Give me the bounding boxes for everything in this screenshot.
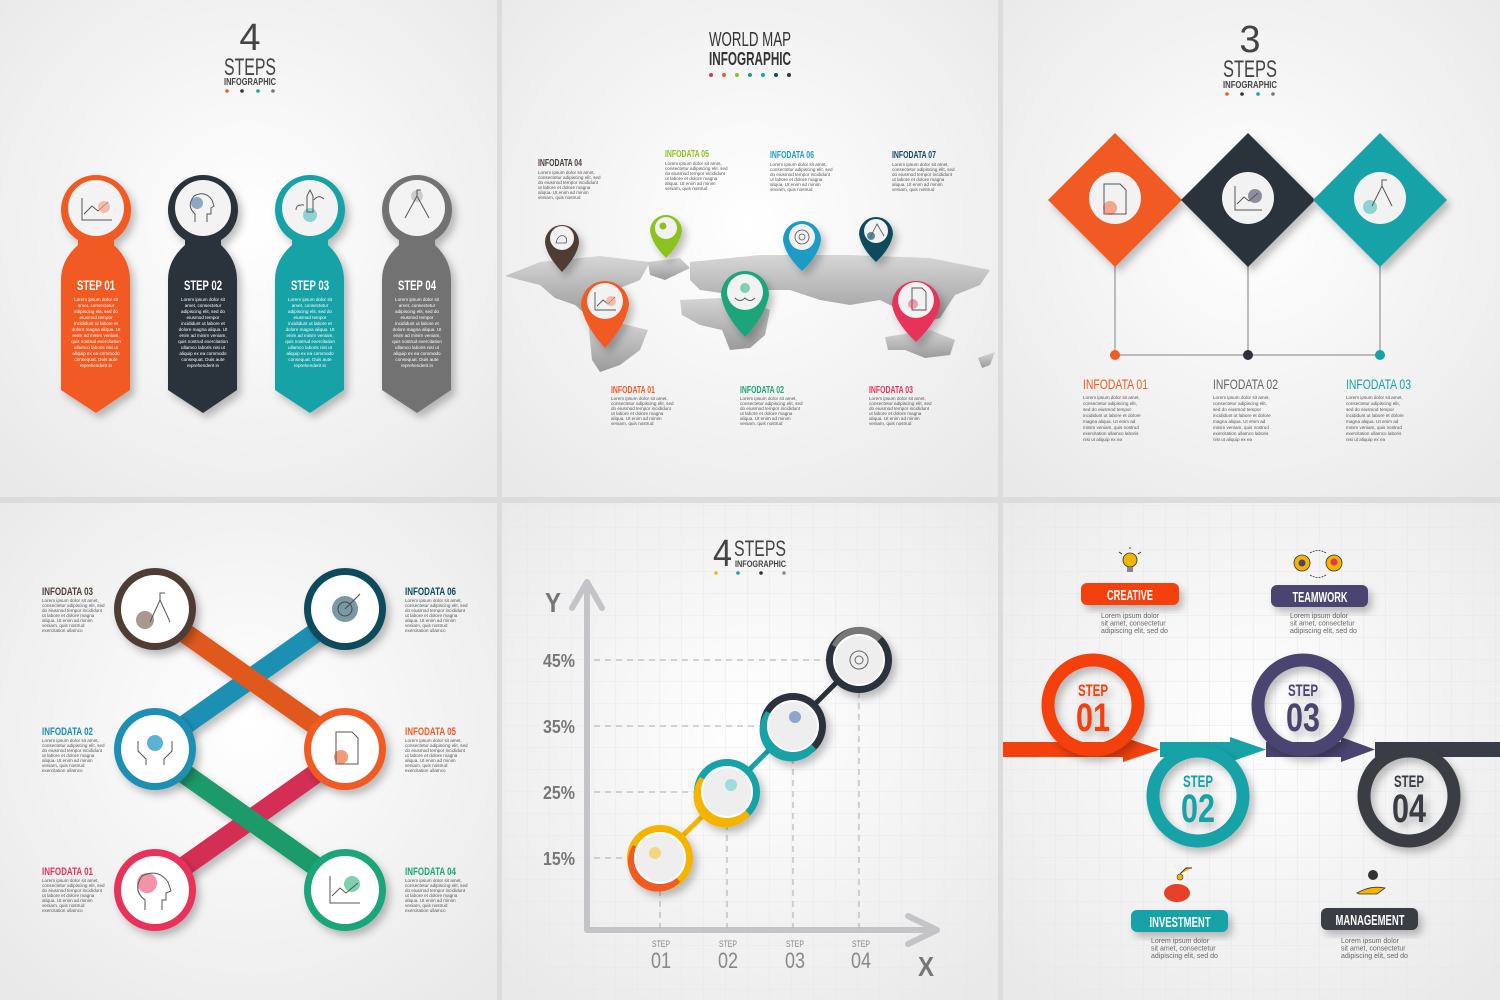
panel: X cross: exercitation ullamco <box>42 768 83 773</box>
pillar texts: ullamco laboris nisi ut <box>395 345 440 350</box>
labels: infodata X: INFODATA 03 <box>42 586 93 598</box>
lorem blocks: map: do eiusmod tempor incididunt <box>538 180 599 185</box>
lorem blocks: map: Lorem ipsum dolor sit amet, <box>892 162 949 167</box>
pillar texts: consequat. Duis aute <box>181 357 225 362</box>
node: step 02 <box>694 759 760 827</box>
lorem blocks: map: do eiusmod tempor incididunt <box>770 172 831 177</box>
pillar texts: incididunt ut labore et <box>288 321 333 326</box>
title: 4 steps chart: INFOGRAPHIC <box>735 559 786 569</box>
lorem texts <box>1101 613 1408 960</box>
pillar texts: aliquip ex ea commodo <box>179 351 227 356</box>
bands <box>165 619 335 880</box>
pillar texts: amet, consectetur <box>78 303 115 308</box>
labels: infodata X: INFODATA 06 <box>405 586 456 598</box>
lorem blocks: map: consectetur adipiscing elit, sed <box>770 167 833 172</box>
pillar texts: quis nostrud exercitation <box>178 339 228 344</box>
button: teamwork: TEAMWORK <box>1292 589 1348 606</box>
lorem texts: adipiscing elit, sed do <box>1101 628 1168 635</box>
pillar texts: amet, consectetur <box>292 303 329 308</box>
lorem blocks: map: Lorem ipsum dolor sit amet, <box>611 396 668 401</box>
labels: infodata: INFODATA 02 <box>740 385 784 396</box>
panel: X cross: ut labore et dolore magna <box>42 893 95 898</box>
pillar texts: incididunt ut labore et <box>181 321 226 326</box>
lorem blocks: map: do eiusmod tempor incididunt <box>892 172 953 177</box>
panel: growth chart <box>543 533 937 982</box>
diamond: step 2 <box>1181 133 1315 267</box>
panel: X cross: do eiusmod tempor incididunt <box>405 608 466 613</box>
pillar texts: quis nostrud exercitation <box>285 339 335 344</box>
panel: X cross: Lorem ipsum dolor sit amet, <box>405 738 462 743</box>
lorem blocks: map: veniam, quis nostrud <box>611 421 654 426</box>
panel: X cross: consectetur adipiscing elit, sed <box>42 883 105 888</box>
axis labels: 25% <box>543 783 575 803</box>
diamond: step 1 <box>1048 133 1182 267</box>
labels: infodata X: INFODATA 05 <box>405 726 456 738</box>
lorem blocks: map: aliqua. Ut enim ad minim <box>770 182 821 187</box>
button: management <box>1321 908 1418 930</box>
node: step 03 <box>760 693 826 761</box>
lorem blocks: map: Lorem ipsum dolor sit amet, <box>740 396 797 401</box>
pillar texts: consequat. Duis aute <box>395 357 439 362</box>
lorem blocks: map: Lorem ipsum dolor sit amet, <box>770 162 827 167</box>
labels: infodata: INFODATA 07 <box>892 150 936 161</box>
panel: X cross: ut labore et dolore magna <box>405 893 458 898</box>
button: teamwork <box>1271 585 1368 607</box>
lorem texts: Lorem ipsum dolor <box>1341 938 1400 945</box>
connectors <box>660 660 859 858</box>
panel: X cross: ut labore et dolore magna <box>405 613 458 618</box>
panel: X cross: veniam, quis nostrud <box>405 623 448 628</box>
lorem blocks: map: consectetur adipiscing elit, sed <box>665 166 728 171</box>
pillar texts: ullamco laboris nisi ut <box>74 345 119 350</box>
button: creative: CREATIVE <box>1107 587 1153 604</box>
ring: step 02: 02 <box>1181 787 1215 831</box>
step labels: STEP <box>786 939 804 949</box>
panel: X cross: aliqua. Ut enim ad minim <box>42 758 93 763</box>
pillar texts: eiusmod tempor <box>401 315 434 320</box>
lorem blocks: map: ut labore et dolore magna <box>770 177 823 182</box>
pillar texts: aliquip ex ea commodo <box>393 351 441 356</box>
panel: X cross: exercitation ullamco <box>405 908 446 913</box>
pillar texts <box>71 297 442 368</box>
panel: X cross: ut labore et dolore magna <box>42 753 95 758</box>
title: 4 steps: STEPS <box>224 54 276 81</box>
pillar texts: aliquip ex ea commodo <box>72 351 120 356</box>
node: step 01 <box>627 825 693 892</box>
lorem blocks: map: do eiusmod tempor incididunt <box>611 406 672 411</box>
axis labels: 45% <box>543 651 575 671</box>
title: 3 steps <box>1223 19 1277 96</box>
step labels: 04 <box>851 948 871 973</box>
pillar: step 03 <box>275 175 345 413</box>
pillar texts: consequat. Duis aute <box>288 357 332 362</box>
pillar texts: aliquip ex ea commodo <box>286 351 334 356</box>
panel: X cross: Lorem ipsum dolor sit amet, <box>405 598 462 603</box>
pillar texts: Lorem ipsum dolor sit <box>181 297 226 302</box>
lorem blocks: map: veniam, quis nostrud <box>869 421 912 426</box>
panel: X cross: Lorem ipsum dolor sit amet, <box>42 738 99 743</box>
labels: infodata: INFODATA 06 <box>770 150 814 161</box>
panel: 4 steps pillars <box>61 17 452 413</box>
step labels: STEP <box>652 939 670 949</box>
panel: 3 steps diamonds: consectetur adipiscing elit, <box>1083 401 1137 406</box>
panel: X cross: veniam, quis nostrud <box>42 763 85 768</box>
pillar: step 02 <box>168 175 238 413</box>
pillar texts: eiusmod tempor <box>294 315 327 320</box>
ring: step 03: 03 <box>1286 696 1320 740</box>
panel: X cross: aliqua. Ut enim ad minim <box>42 618 93 623</box>
panel: 3 steps diamonds: Lorem ipsum dolor sit amet, <box>1083 395 1140 400</box>
ring: step 01 <box>1048 660 1138 750</box>
title: 3 steps: INFOGRAPHIC <box>1223 80 1277 91</box>
labels: infodata: INFODATA 01 <box>611 385 655 396</box>
pillar: step 02: STEP 02 <box>184 277 222 293</box>
labels: infodata: INFODATA 03 <box>869 385 913 396</box>
lorem blocks: map: veniam, quis nostrud <box>740 421 783 426</box>
panel: X cross: do eiusmod tempor incididunt <box>405 888 466 893</box>
panel: X cross: do eiusmod tempor incididunt <box>42 888 103 893</box>
step labels <box>651 939 871 973</box>
lorem blocks: map: aliqua. Ut enim ad minim <box>665 181 716 186</box>
circle: infodata 02 <box>114 708 196 790</box>
step labels: 03 <box>785 948 805 973</box>
ring: step 02: STEP <box>1183 772 1213 791</box>
labels: infodata 01-03: INFODATA 01 <box>1083 376 1148 392</box>
title: 4 steps chart <box>713 533 786 575</box>
lorem blocks: map: consectetur adipiscing elit, sed <box>538 175 601 180</box>
pillar texts: adipiscing elit, sed do <box>74 309 118 314</box>
pillar texts: adipiscing elit, sed do <box>395 309 439 314</box>
pillar texts: enim ad minim veniam, <box>72 333 120 338</box>
axes <box>572 582 937 944</box>
panel: 3 steps diamonds: minim veniam, quis nostrud <box>1083 425 1139 430</box>
panel: X cross: consectetur adipiscing elit, sed <box>42 743 105 748</box>
panel: X cross: Lorem ipsum dolor sit amet, <box>405 878 462 883</box>
pillar: step 04 <box>382 175 452 413</box>
circle: infodata 03 <box>114 568 196 650</box>
step labels: 02 <box>718 948 738 973</box>
panel: X cross: Lorem ipsum dolor sit amet, <box>42 598 99 603</box>
pillar texts: Lorem ipsum dolor sit <box>395 297 440 302</box>
panel: X cross: aliqua. Ut enim ad minim <box>42 898 93 903</box>
icon: piggy bank <box>1164 868 1192 902</box>
pillar texts: quis nostrud exercitation <box>392 339 442 344</box>
labels: infodata <box>538 149 936 396</box>
connector lines <box>1115 265 1380 355</box>
labels: infodata: INFODATA 04 <box>538 158 582 169</box>
pillar texts: enim ad minim veniam, <box>179 333 227 338</box>
pillar texts: eiusmod tempor <box>187 315 220 320</box>
panel: X cross: veniam, quis nostrud <box>42 623 85 628</box>
ring: step 03 <box>1258 660 1348 750</box>
lorem blocks: map: aliqua. Ut enim ad minim <box>611 416 662 421</box>
panel: 3 steps diamonds: exercitation ullamco laboris <box>1213 431 1269 436</box>
pin: infodata 03 <box>892 281 940 342</box>
labels: infodata 01-03: INFODATA 02 <box>1213 376 1278 392</box>
lorem texts: sit amet, consectetur <box>1101 620 1166 628</box>
pillar texts: adipiscing elit, sed do <box>181 309 225 314</box>
title: 4 steps: 4 <box>239 17 261 59</box>
ring: step 01: STEP <box>1078 681 1108 700</box>
panel: X cross: do eiusmod tempor incididunt <box>42 748 103 753</box>
panel: 3 steps diamonds: nisi ut aliquip ex ea <box>1083 437 1123 442</box>
pillar texts: Lorem ipsum dolor sit <box>288 297 333 302</box>
labels: infodata X: INFODATA 01 <box>42 866 93 878</box>
lorem blocks: map: do eiusmod tempor incididunt <box>869 406 930 411</box>
ring: step 02 <box>1153 751 1243 841</box>
button: management: MANAGEMENT <box>1336 912 1404 929</box>
circle: infodata 05 <box>304 708 386 790</box>
lorem blocks: map: veniam, quis nostrud <box>538 195 581 200</box>
panel: X cross: consectetur adipiscing elit, sed <box>405 603 468 608</box>
lorem blocks: map: consectetur adipiscing elit, sed <box>740 401 803 406</box>
panel: X cross: consectetur adipiscing elit, sed <box>405 743 468 748</box>
pillar texts: eiusmod tempor <box>80 315 113 320</box>
title: world map infographic: WORLD MAP <box>709 29 791 51</box>
panel: 3 steps diamonds: minim veniam, quis nostrud <box>1346 425 1402 430</box>
panel: 3 steps diamonds: exercitation ullamco laboris <box>1083 431 1139 436</box>
title: 4 steps chart: 4 <box>713 533 732 575</box>
axis labels <box>543 587 934 982</box>
title: world map infographic <box>709 29 791 77</box>
pin: infodata 01 <box>581 281 629 348</box>
button: investment: INVESTMENT <box>1150 914 1210 931</box>
lorem texts: Lorem ipsum dolor <box>1101 613 1160 620</box>
pin: infodata 02 <box>721 271 769 337</box>
axis labels: 35% <box>543 717 575 737</box>
panel: X cross: exercitation ullamco <box>405 628 446 633</box>
lorem blocks: map: do eiusmod tempor incididunt <box>665 171 726 176</box>
lorem texts: Lorem ipsum dolor <box>1290 613 1349 620</box>
lorem blocks: map: Lorem ipsum dolor sit amet, <box>665 161 722 166</box>
pin: infodata 04 <box>545 225 579 272</box>
panel: 3 steps diamonds: Lorem ipsum dolor sit amet, <box>1346 395 1403 400</box>
lorem texts: sit amet, consectetur <box>1151 946 1216 952</box>
panel: 3 steps diamonds: incididunt ut labore et dolore <box>1346 413 1404 418</box>
axis labels: X <box>918 951 934 982</box>
panel: 3 steps diamonds: incididunt ut labore et dolore <box>1083 413 1141 418</box>
circle: infodata 01 <box>114 849 196 931</box>
lorem blocks: map: ut labore et dolore magna <box>892 177 945 182</box>
panel: X cross: ut labore et dolore magna <box>42 613 95 618</box>
pin: infodata 06 <box>783 221 821 271</box>
ring: step 01: 01 <box>1076 696 1110 740</box>
lorem blocks: map: ut labore et dolore magna <box>611 411 664 416</box>
pillar: step 01 <box>61 175 131 413</box>
pillar texts: adipiscing elit, sed do <box>288 309 332 314</box>
step labels: STEP <box>719 939 737 949</box>
lorem blocks: map: ut labore et dolore magna <box>665 176 718 181</box>
panel: X cross: do eiusmod tempor incididunt <box>42 608 103 613</box>
pillar texts: amet, consectetur <box>399 303 436 308</box>
map: continents <box>505 255 995 372</box>
panel: 3 steps diamonds: minim veniam, quis nostrud <box>1213 425 1269 430</box>
lorem blocks: map: Lorem ipsum dolor sit amet, <box>869 396 926 401</box>
pillar texts: quis nostrud exercitation <box>71 339 121 344</box>
lorem blocks: map: veniam, quis nostrud <box>665 186 708 191</box>
step labels: 01 <box>651 948 671 973</box>
title: 3 steps: 3 <box>1239 19 1261 61</box>
step labels: STEP <box>852 939 870 949</box>
axis labels: Y <box>545 587 561 618</box>
pillar texts: reprehenderit in <box>80 363 113 368</box>
lorem blocks: map: consectetur adipiscing elit, sed <box>869 401 932 406</box>
labels: infodata X: INFODATA 04 <box>405 866 457 878</box>
lorem blocks: map: Lorem ipsum dolor sit amet, <box>538 170 595 175</box>
lorem texts: adipiscing elit, sed do <box>1341 953 1408 960</box>
lorem blocks: map: ut labore et dolore magna <box>538 185 591 190</box>
panel: 3 steps diamonds: sed do eiusmod tempor <box>1083 407 1131 412</box>
panel: X cross: aliqua. Ut enim ad minim <box>405 758 456 763</box>
title: 4 steps <box>224 17 276 93</box>
ring: step 04: 04 <box>1392 787 1427 831</box>
pillar: step 03: STEP 03 <box>291 277 329 293</box>
labels: infodata 01-03: INFODATA 03 <box>1346 376 1411 392</box>
pillar texts: dolore magna aliqua. Ut <box>393 327 442 332</box>
pillar texts: enim ad minim veniam, <box>393 333 441 338</box>
pillar texts: enim ad minim veniam, <box>286 333 334 338</box>
panel: X cross: do eiusmod tempor incididunt <box>405 748 466 753</box>
ring: step 04 <box>1364 751 1454 841</box>
pin: infodata 07 <box>859 217 893 262</box>
panel: 3 steps diamonds: sed do eiusmod tempor <box>1213 407 1261 412</box>
button: creative <box>1081 583 1179 605</box>
labels: infodata X: INFODATA 02 <box>42 726 93 738</box>
pillar texts: incididunt ut labore et <box>395 321 440 326</box>
pillar texts: dolore magna aliqua. Ut <box>179 327 228 332</box>
lorem texts: sit amet, consectetur <box>1341 946 1406 952</box>
title: 3 steps: STEPS <box>1223 56 1277 83</box>
panel: X cross: Lorem ipsum dolor sit amet, <box>42 878 99 883</box>
panel: X cross: exercitation ullamco <box>42 628 83 633</box>
panel: X cross <box>42 568 468 931</box>
panel: X cross: aliqua. Ut enim ad minim <box>405 898 456 903</box>
ring: step 03: STEP <box>1288 681 1318 700</box>
title: 4 steps: INFOGRAPHIC <box>224 77 276 88</box>
lorem blocks: map: veniam, quis nostrud <box>770 187 813 192</box>
panel: X cross: consectetur adipiscing elit, sed <box>42 603 105 608</box>
panel: X cross: veniam, quis nostrud <box>42 903 85 908</box>
pillar texts: dolore magna aliqua. Ut <box>72 327 121 332</box>
lorem texts: adipiscing elit, sed do <box>1151 953 1218 960</box>
lorem blocks: map: aliqua. Ut enim ad minim <box>892 182 943 187</box>
panel: X cross: aliqua. Ut enim ad minim <box>405 618 456 623</box>
axis labels: 15% <box>543 849 575 869</box>
pillar texts: ullamco laboris nisi ut <box>181 345 226 350</box>
title: 4 steps chart: STEPS <box>734 536 786 561</box>
panel: X cross: consectetur adipiscing elit, sed <box>405 883 468 888</box>
circle: infodata 06 <box>304 568 386 650</box>
icon: hand gear <box>1357 870 1385 894</box>
labels: infodata 01-03 <box>1083 376 1411 392</box>
dots on line <box>1110 350 1385 360</box>
pillar texts: reprehenderit in <box>294 363 327 368</box>
panel: 3 steps diamonds: nisi ut aliquip ex ea <box>1346 437 1386 442</box>
panel: 3 steps diamonds: incididunt ut labore et dolore <box>1213 413 1271 418</box>
lorem blocks: map: do eiusmod tempor incididunt <box>740 406 801 411</box>
node: step 04 <box>826 627 892 693</box>
lorem blocks: map: ut labore et dolore magna <box>740 411 793 416</box>
pillar texts: Lorem ipsum dolor sit <box>74 297 119 302</box>
panel: X cross: veniam, quis nostrud <box>405 903 448 908</box>
pillar texts: amet, consectetur <box>185 303 222 308</box>
labels: infodata: INFODATA 05 <box>665 149 709 160</box>
pillar texts: reprehenderit in <box>401 363 434 368</box>
button: investment <box>1131 910 1228 932</box>
icon: bulb <box>1119 547 1141 572</box>
pillar texts: ullamco laboris nisi ut <box>288 345 333 350</box>
panel: 3 steps diamonds: consectetur adipiscing elit, <box>1346 401 1400 406</box>
panel: 3 steps diamonds: magna aliqua. Ut enim ad <box>1083 419 1136 424</box>
labels: infodata X <box>42 586 457 878</box>
lorem blocks: map: veniam, quis nostrud <box>892 187 935 192</box>
lorem texts: sit amet, consectetur <box>1290 620 1355 628</box>
lorem blocks: map: aliqua. Ut enim ad minim <box>869 416 920 421</box>
lorem blocks: map: consectetur adipiscing elit, sed <box>611 401 674 406</box>
panel: X cross: exercitation ullamco <box>42 908 83 913</box>
panel: 3 steps diamonds: sed do eiusmod tempor <box>1346 407 1394 412</box>
panel: 3 steps diamonds <box>1048 19 1447 442</box>
icon: team heads <box>1294 550 1342 578</box>
panel: 3 steps diamonds: magna aliqua. Ut enim ad <box>1213 419 1266 424</box>
title: world map infographic: INFOGRAPHIC <box>709 49 791 69</box>
lorem texts: Lorem ipsum dolor <box>1151 938 1210 945</box>
pillar texts: consequat. Duis aute <box>74 357 118 362</box>
pin: infodata 05 <box>650 215 682 258</box>
panel: 3 steps diamonds: magna aliqua. Ut enim ad <box>1346 419 1399 424</box>
panel: world map <box>505 29 995 426</box>
pillar: step 01: STEP 01 <box>77 277 115 293</box>
panel: step loops <box>1003 547 1500 960</box>
lorem blocks: map: aliqua. Ut enim ad minim <box>538 190 589 195</box>
panel: 3 steps diamonds: consectetur adipiscing elit, <box>1213 401 1267 406</box>
band <box>1003 737 1500 762</box>
panel: 3 steps diamonds: Lorem ipsum dolor sit amet, <box>1213 395 1270 400</box>
panel: X cross: exercitation ullamco <box>405 768 446 773</box>
lorem blocks: map <box>538 161 955 426</box>
gridline guides <box>594 660 859 928</box>
pillar: step 04: STEP 04 <box>398 277 436 293</box>
circle: infodata 04 <box>304 849 386 931</box>
panel: 3 steps diamonds: nisi ut aliquip ex ea <box>1213 437 1253 442</box>
lorem blocks: map: consectetur adipiscing elit, sed <box>892 167 955 172</box>
pillar texts: reprehenderit in <box>187 363 220 368</box>
ring: step 04: STEP <box>1394 772 1424 791</box>
panel: X cross: ut labore et dolore magna <box>405 753 458 758</box>
pillar texts: incididunt ut labore et <box>74 321 119 326</box>
lorem texts: adipiscing elit, sed do <box>1290 628 1357 635</box>
lorem blocks: map: ut labore et dolore magna <box>869 411 922 416</box>
pillar texts: dolore magna aliqua. Ut <box>286 327 335 332</box>
panel: 3 steps diamonds: exercitation ullamco laboris <box>1346 431 1402 436</box>
lorem blocks: map: aliqua. Ut enim ad minim <box>740 416 791 421</box>
panel: X cross: veniam, quis nostrud <box>405 763 448 768</box>
diamond: step 3 <box>1313 133 1447 267</box>
